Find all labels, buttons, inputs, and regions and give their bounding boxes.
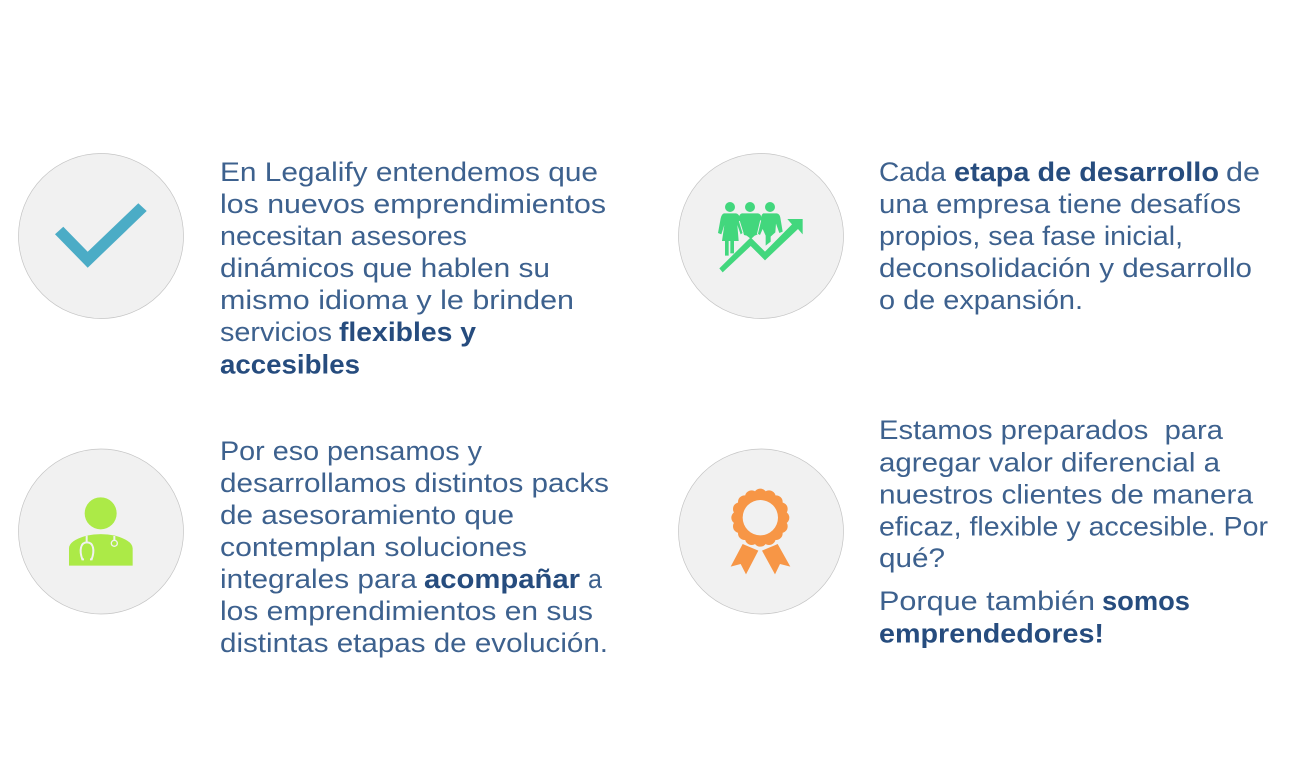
- text block: entrepreneurs: Porque también: [879, 586, 1095, 616]
- text block: entrepreneurs: somos: [1102, 586, 1190, 616]
- text block: packs: integrales para: [220, 564, 417, 594]
- text block: packs: Por eso pensamos y: [220, 436, 483, 466]
- text block: entrepreneurs: agregar valor diferencial a: [879, 448, 1220, 478]
- text block: development stages: deconsolidación y desarrollo: [879, 253, 1252, 283]
- icon: doctor with stethoscope in circle: [18, 449, 184, 614]
- text block: entrepreneurs: qué?: [879, 543, 945, 573]
- icon: award rosette in circle: [678, 449, 844, 614]
- text block: Legalify intro: mismo idioma y le brinden: [220, 285, 574, 315]
- text block: entrepreneurs: emprendedores!: [879, 618, 1104, 648]
- panel: check item: [18, 154, 606, 380]
- text block: Legalify intro: En Legalify entendemos que: [220, 157, 598, 187]
- text block: packs: a: [588, 564, 602, 594]
- text block: packs: desarrollamos distintos packs: [220, 468, 609, 498]
- panel: award item: [678, 415, 1268, 648]
- text block: Legalify intro: [220, 157, 606, 380]
- panel: doctor item: [18, 436, 609, 658]
- text block: Legalify intro: flexibles y: [339, 317, 476, 347]
- panel: growth stage item: [678, 154, 1260, 318]
- text block: development stages: Cada: [879, 157, 946, 187]
- text block: Legalify intro: servicios: [220, 317, 332, 347]
- text block: entrepreneurs: eficaz, flexible y accesible. Por: [879, 512, 1268, 542]
- text block: Legalify intro: los nuevos emprendimientos: [220, 189, 606, 219]
- text block: entrepreneurs: [879, 415, 1268, 648]
- text block: development stages: una empresa tiene desafíos: [879, 189, 1241, 219]
- text block: development stages: propios, sea fase inicial,: [879, 221, 1183, 251]
- text block: development stages: [879, 157, 1260, 315]
- icon: people with rising arrow in circle: [678, 154, 844, 318]
- text block: packs: de asesoramiento que: [220, 500, 514, 530]
- text block: Legalify intro: accesibles: [220, 350, 360, 380]
- text block: Legalify intro: necesitan asesores: [220, 221, 467, 251]
- text block: packs: acompañar: [424, 564, 580, 594]
- text block: packs: los emprendimientos en sus: [220, 596, 593, 626]
- text block: Legalify intro: dinámicos que hablen su: [220, 253, 550, 283]
- text block: packs: distintas etapas de evolución.: [220, 628, 608, 658]
- text block: development stages: etapa de desarrollo: [954, 157, 1219, 187]
- text block: entrepreneurs: nuestros clientes de manera: [879, 480, 1253, 510]
- text block: development stages: de: [1226, 157, 1260, 187]
- text block: packs: [220, 436, 609, 658]
- text block: development stages: o de expansión.: [879, 285, 1083, 315]
- text block: entrepreneurs: Estamos preparados para: [879, 415, 1223, 445]
- text block: packs: contemplan soluciones: [220, 532, 527, 562]
- icon: check mark in circle: [18, 154, 184, 318]
